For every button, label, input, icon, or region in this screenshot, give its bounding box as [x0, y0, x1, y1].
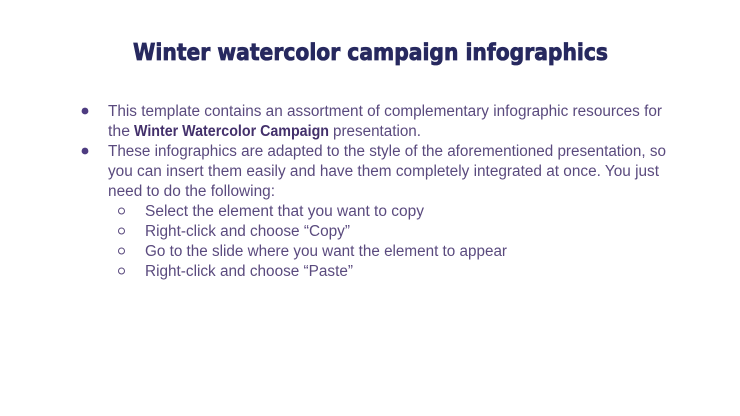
- title: Winter watercolor campaign infographics: [133, 40, 608, 66]
- bullet item: template description: [82, 103, 662, 140]
- step 1: Select the element that you want to copy: [145, 203, 424, 220]
- step 3: Go to the slide where you want the element to appear: [145, 243, 507, 260]
- bullet item: template description: Winter Watercolor Campaign: [134, 123, 329, 140]
- bullet item: usage instructions: you can insert them easily and have them completely integrated at once. You just: [108, 163, 660, 180]
- step 2: Right-click and choose “Copy”: [145, 223, 350, 240]
- step 4: Right-click and choose “Paste”: [145, 263, 353, 280]
- bullet item: template description: presentation.: [333, 123, 421, 140]
- bullet item: usage instructions: These infographics are adapted to the style of the aforementioned presentation, so: [108, 143, 666, 160]
- sub-list: steps: [118, 203, 507, 280]
- bullet item: template description: the: [108, 123, 130, 140]
- text block: bullet list: [82, 103, 666, 280]
- bullet item: usage instructions: [82, 143, 666, 200]
- bullet item: usage instructions: need to do the following:: [108, 183, 275, 200]
- bullet item: template description: This template contains an assortment of complementary infographic resources for: [108, 103, 662, 120]
